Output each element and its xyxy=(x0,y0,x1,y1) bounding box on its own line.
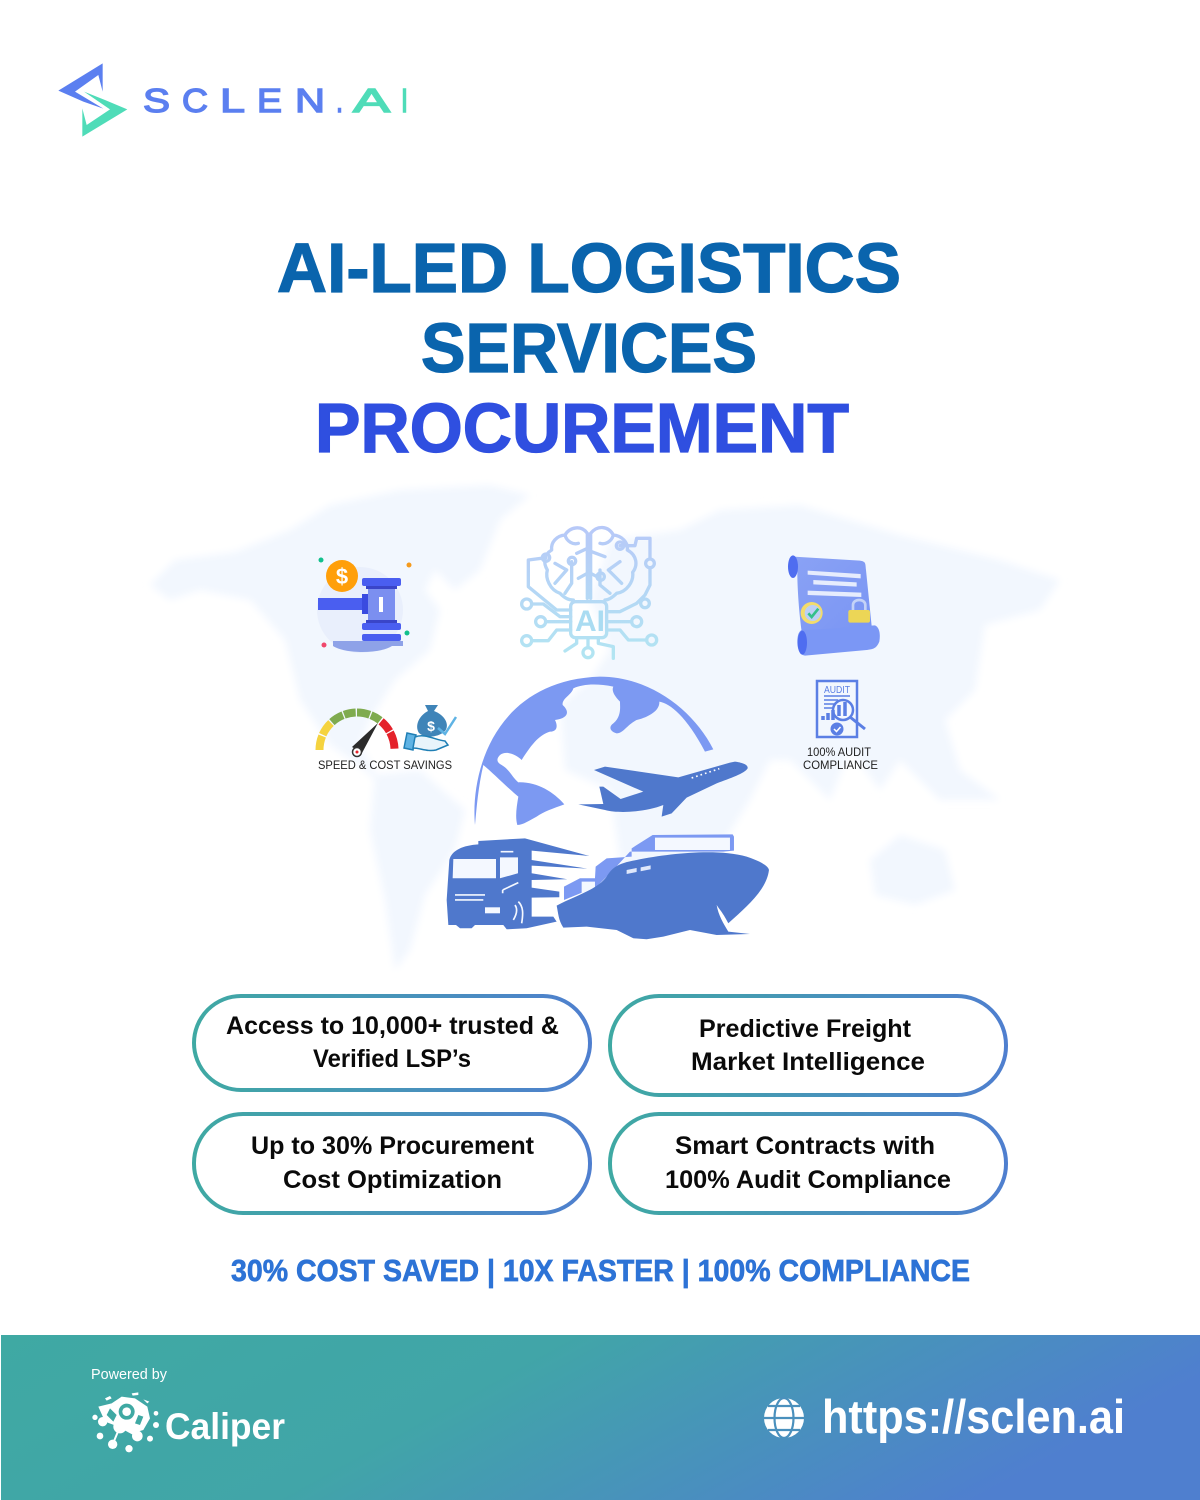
icon: truck xyxy=(447,838,589,929)
icon: audit report with magnifier xyxy=(817,681,865,737)
footer band xyxy=(1,1335,1200,1500)
icon: AI brain circuit xyxy=(522,528,657,658)
world map background xyxy=(150,485,1060,970)
icon: money bag in hand xyxy=(404,705,456,751)
panel: procurement cost optimization: Cost Optimization xyxy=(283,1166,502,1194)
logo wordmark: I xyxy=(401,82,408,119)
icon text: AI chip: AI xyxy=(575,605,605,638)
label: audit compliance: COMPLIANCE xyxy=(803,758,878,772)
text: powered by: Powered by xyxy=(91,1366,167,1383)
icon: Caliper mark xyxy=(92,1392,159,1452)
icon: logo arrows xyxy=(58,63,127,137)
label: speed and cost savings: SPEED & COST SAVINGS xyxy=(318,758,452,772)
panel: smart contracts xyxy=(610,1114,1006,1213)
panel: smart contracts: Smart Contracts with xyxy=(675,1132,935,1160)
icon: gavel with dollar coin xyxy=(317,558,412,653)
icon: globe xyxy=(764,1398,804,1438)
icon: speed gauge xyxy=(320,712,394,756)
logo: SCLEN.AI xyxy=(58,63,408,137)
panel: trusted LSP access: Verified LSP’s xyxy=(313,1045,471,1073)
label: audit compliance xyxy=(803,745,878,772)
icon: globe xyxy=(474,677,713,825)
panel: freight market intelligence: Predictive Freight xyxy=(699,1015,912,1043)
panel: procurement cost optimization: Up to 30% Procurement xyxy=(251,1132,535,1160)
icon: money bag in hand: $ xyxy=(427,718,435,734)
key metrics line: 30% COST SAVED | 10X FASTER | 100% COMPLIANCE xyxy=(231,1253,970,1288)
title: PROCUREMENT xyxy=(315,389,849,467)
logo: Caliper xyxy=(92,1392,285,1452)
logo wordmark: N xyxy=(295,82,325,119)
logo wordmark: C xyxy=(182,82,208,119)
panel: smart contracts: 100% Audit Compliance xyxy=(665,1166,951,1194)
icon: contract scroll with lock xyxy=(788,555,880,656)
panel: trusted LSP access xyxy=(194,996,590,1090)
label: audit compliance: 100% AUDIT xyxy=(807,745,872,759)
logo: Caliper: Caliper xyxy=(165,1406,285,1447)
panel: freight market intelligence xyxy=(610,996,1006,1095)
title xyxy=(277,229,901,467)
icon: airplane xyxy=(578,762,748,817)
icon: audit report with magnifier: AUDIT xyxy=(824,685,850,696)
logo wordmark: L xyxy=(220,82,245,119)
logo wordmark: S xyxy=(143,82,170,119)
panel: trusted LSP access: Access to 10,000+ trusted & xyxy=(226,1012,559,1040)
title: SERVICES xyxy=(421,309,757,387)
logo wordmark: . xyxy=(336,82,343,119)
icon: gavel with dollar coin: $ xyxy=(336,564,348,589)
panel: freight market intelligence: Market Intelligence xyxy=(691,1048,925,1076)
logo wordmark: A xyxy=(353,82,390,119)
logo wordmark: E xyxy=(257,82,282,119)
title: AI-LED LOGISTICS xyxy=(277,229,901,307)
logo wordmark xyxy=(143,82,408,119)
icon: cargo ship xyxy=(557,834,769,939)
text: website url: https://sclen.ai xyxy=(822,1390,1125,1443)
panel: procurement cost optimization xyxy=(194,1114,590,1213)
